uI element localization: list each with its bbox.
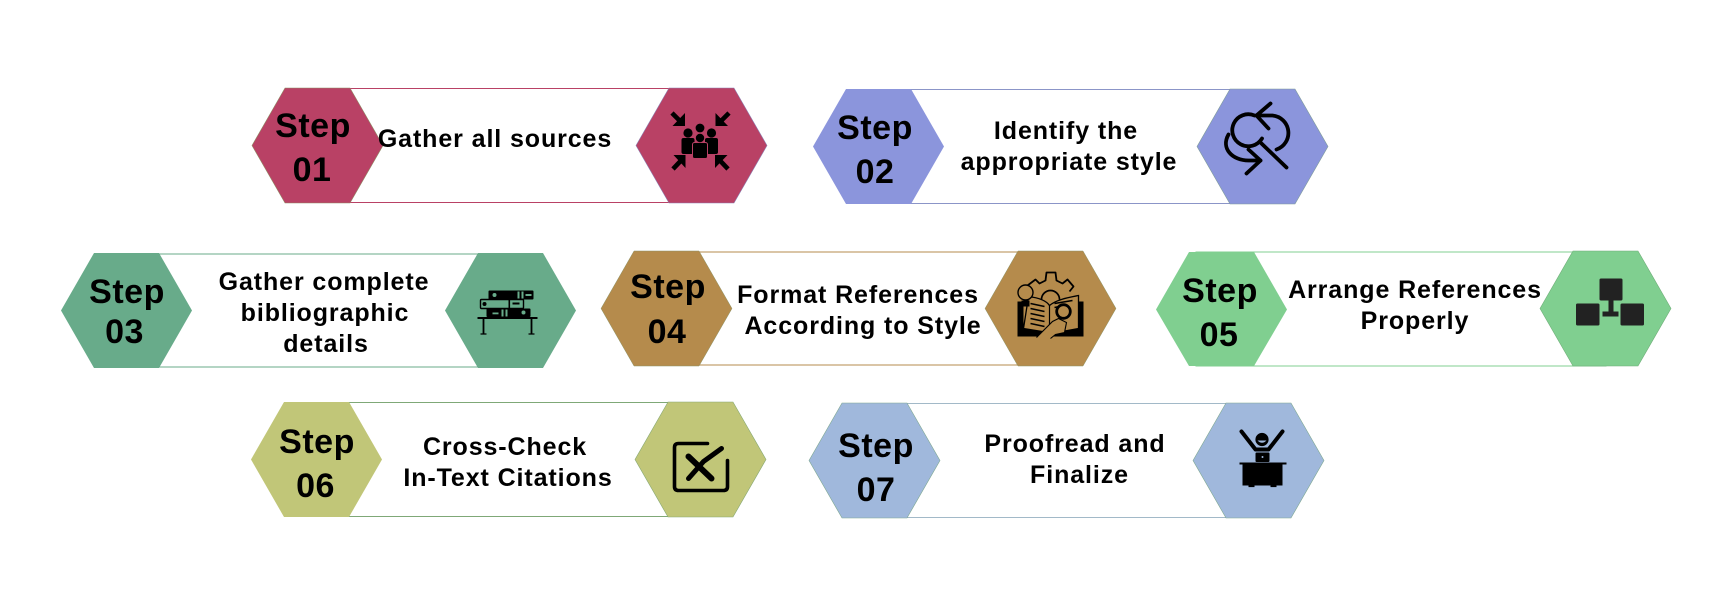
right hexagon: [985, 251, 1116, 366]
left hexagon: [251, 402, 382, 517]
step title: Identify the: [994, 117, 1138, 145]
panel: step 01: [252, 88, 767, 203]
left hexagon: [809, 403, 940, 518]
text band: [349, 402, 668, 516]
step number: 04: [648, 313, 686, 351]
step number: 06: [296, 467, 335, 505]
step number: Step: [1182, 272, 1258, 310]
step title: In-Text Citations: [403, 464, 613, 492]
step number: Step: [89, 273, 165, 311]
icon: magnifier with cycle arrows: [1226, 104, 1288, 174]
step title: According to Style: [744, 312, 982, 340]
right hexagon: [1540, 251, 1671, 366]
step number: 01: [293, 151, 331, 189]
left hexagon: [61, 253, 192, 368]
panel: step 07: [809, 403, 1324, 518]
icon: person celebrating at desk: [1240, 432, 1286, 487]
step number: Step: [837, 109, 913, 147]
step number: 07: [857, 471, 895, 509]
step number: 02: [856, 153, 894, 191]
text band: [907, 404, 1226, 518]
step title: appropriate style: [961, 148, 1177, 176]
panel: step 06: [251, 402, 766, 517]
text band: [1196, 252, 1606, 366]
left hexagon: [1156, 252, 1287, 366]
icon: open book, gear, bulb and magnifier: [1018, 272, 1084, 338]
icon: people gathering: [672, 113, 729, 169]
icon: checkbox with cross: [674, 444, 728, 490]
right hexagon: [636, 88, 767, 203]
right hexagon: [635, 402, 766, 517]
step title: Properly: [1361, 307, 1469, 335]
step number: 03: [105, 313, 144, 351]
panel: step 05: [1156, 251, 1671, 366]
panel: step 04: [601, 251, 1116, 366]
step title: Finalize: [1030, 461, 1129, 489]
panel: step 02: [813, 89, 1328, 204]
right hexagon: [1193, 403, 1324, 518]
step title: Gather all sources: [378, 125, 612, 153]
icon: books on a table: [478, 290, 538, 334]
step number: 05: [1200, 316, 1238, 354]
left hexagon: [813, 89, 944, 204]
panel: step 03: [61, 253, 576, 368]
step title: Arrange References: [1288, 276, 1542, 304]
step title: details: [283, 330, 369, 358]
text band: [699, 252, 1018, 365]
step number: Step: [630, 268, 706, 306]
text band: [911, 90, 1230, 204]
step title: Cross-Check: [423, 433, 587, 461]
right hexagon: [1197, 89, 1328, 204]
step title: bibliographic: [241, 299, 409, 327]
icon: connected blocks: [1576, 278, 1644, 326]
text band: [159, 254, 478, 367]
step title: Gather complete: [219, 268, 429, 296]
step title: Format References: [737, 281, 979, 309]
text band: [350, 88, 669, 202]
step number: Step: [279, 423, 355, 461]
step number: Step: [838, 427, 914, 465]
step title: Proofread and: [984, 430, 1166, 458]
left hexagon: [252, 88, 383, 203]
step number: Step: [275, 107, 351, 145]
right hexagon: [445, 253, 576, 368]
left hexagon: [601, 251, 732, 366]
